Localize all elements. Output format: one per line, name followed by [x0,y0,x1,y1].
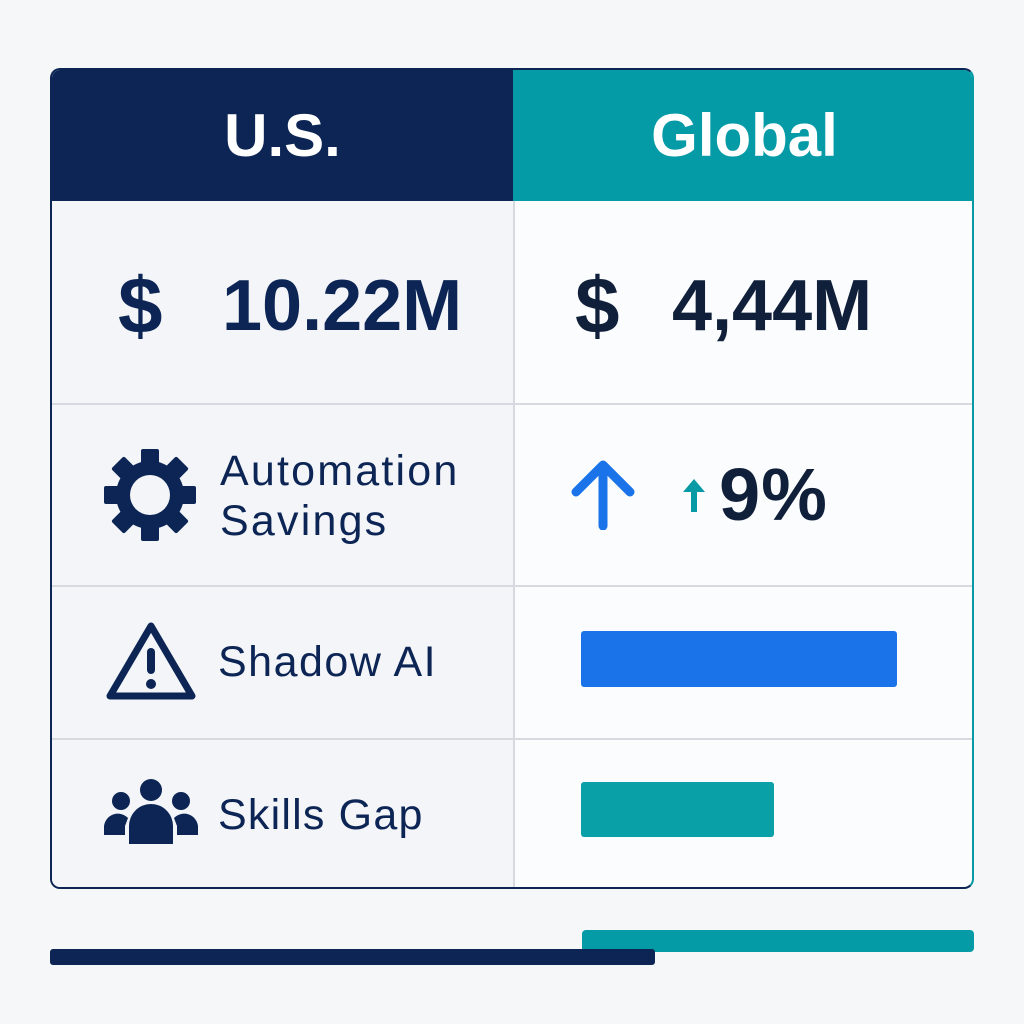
icon: gear [104,449,196,541]
Global cost value: 4,44M [672,266,872,346]
label: Skills Gap: Skills Gap [218,791,424,839]
Global cost value: $ [575,261,620,350]
US cost value: 10.22M [222,266,462,346]
US cost value [118,261,462,350]
header: Global: Global [651,102,838,169]
label: Automation Savings [220,447,460,545]
value: 9%: 9% [719,453,828,536]
icon: people [104,779,198,844]
icon: warning [106,622,196,700]
label: Shadow AI: Shadow AI [218,638,437,686]
table card [50,68,974,889]
header: U.S.: U.S. [224,102,341,169]
bottom bar: teal [582,930,974,952]
label: Automation Savings: Savings [220,497,388,545]
bar: shadow AI [581,631,897,687]
US cost value: $ [118,261,162,350]
Global cost value [575,261,872,350]
bar: skills gap [581,782,774,837]
header: Global [513,70,976,201]
icon: up arrow blue [572,460,634,530]
label: Automation Savings: Automation [220,447,460,495]
header: U.S. [52,70,513,201]
left column background [52,70,513,891]
bottom bar: navy [50,949,655,965]
icon: small teal arrow [683,479,705,512]
